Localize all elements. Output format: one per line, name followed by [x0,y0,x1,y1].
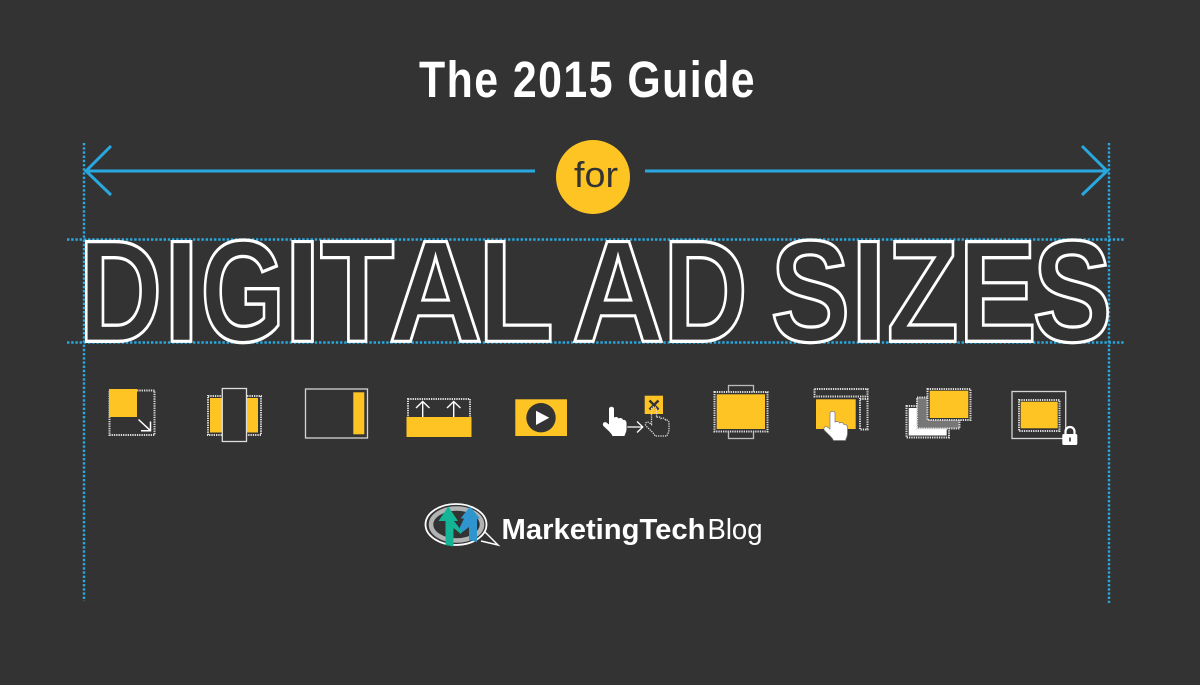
outlined headline: DIGITAL AD SIZES: Z [887,211,959,373]
icon: stacked carousel ad [906,389,970,438]
logo: MarketingTechBlog [426,504,762,546]
outlined headline: DIGITAL AD SIZES: G [200,211,285,373]
icon: video ad [515,399,567,436]
arrow: left width arrow [86,146,535,195]
outlined headline: DIGITAL AD SIZES: I [284,210,321,372]
icon: expanding rectangle [714,386,768,438]
outlined headline: DIGITAL AD SIZES [78,210,1112,373]
icon: click to close interstitial [603,396,669,436]
icon: sidebar ad [306,389,368,438]
arrow: right width arrow [645,146,1107,195]
icon: overlay column ad [208,388,261,442]
outlined headline: DIGITAL AD SIZES: D [78,210,162,372]
title: The 2015 Guide [419,50,756,108]
outlined headline: DIGITAL AD SIZES: S [770,211,850,373]
icon: hover expand ad [814,389,868,440]
outlined headline: DIGITAL AD SIZES: A [388,211,483,373]
blue dotted guide lines [67,143,1125,603]
badge: for [556,140,630,214]
outlined headline: DIGITAL AD SIZES: I [850,210,887,373]
logo speech bubble [426,504,498,546]
outlined headline: DIGITAL AD SIZES: E [958,211,1037,372]
outlined headline: DIGITAL AD SIZES: A [572,211,665,373]
outlined headline: DIGITAL AD SIZES: L [478,210,554,372]
outlined headline: DIGITAL AD SIZES: D [663,211,748,372]
icon: push-up banner [406,399,472,437]
outlined headline: DIGITAL AD SIZES: T [320,211,394,373]
outlined headline: DIGITAL AD SIZES: S [1032,211,1112,373]
outlined headline: DIGITAL AD SIZES: I [163,211,200,373]
icon: expanding ad [109,389,154,435]
badge: for: for [574,154,618,195]
icon: locked sticky ad [1012,392,1077,445]
logo wordmark: MarketingTech [502,514,706,546]
logo wordmark: Blog [708,514,762,546]
